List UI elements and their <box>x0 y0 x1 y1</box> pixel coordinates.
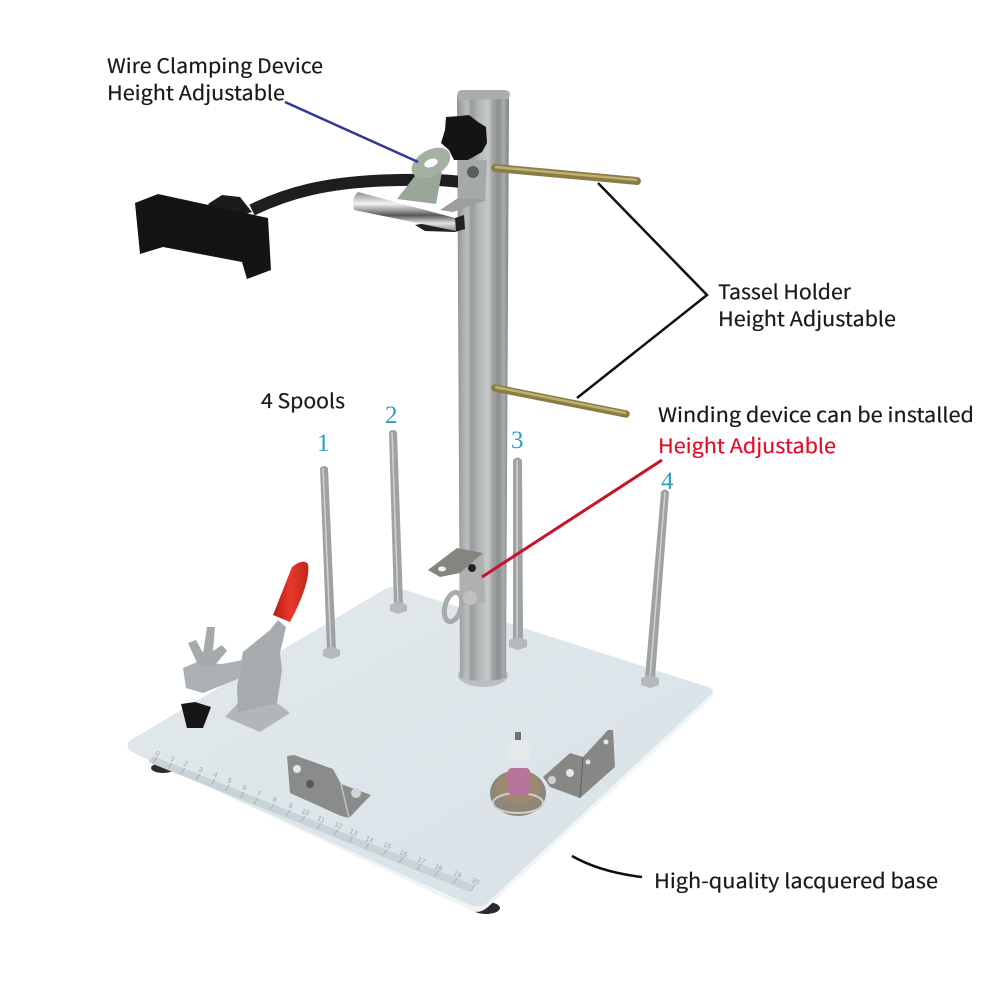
holder knob <box>208 195 252 220</box>
clip bracket tab <box>440 198 487 212</box>
bracket fold <box>580 757 583 798</box>
right bracket <box>543 730 615 798</box>
clip ring hole <box>423 157 439 169</box>
phone holder on gooseneck <box>135 180 460 279</box>
winding device bracket <box>428 548 485 624</box>
spring peg <box>515 732 521 742</box>
bracket holes <box>566 769 574 777</box>
ruler: 20 <box>470 877 480 887</box>
ruler: 12 <box>333 821 343 831</box>
ruler: 7 <box>255 790 262 798</box>
label: winding device: Winding device can be installed <box>658 399 974 428</box>
spool number 2: 2 <box>385 402 398 429</box>
pole collar <box>458 663 508 687</box>
bracket block <box>458 160 487 200</box>
holder clamp <box>135 194 271 279</box>
under clip clamp <box>415 215 465 232</box>
tassel holder rods <box>495 167 637 414</box>
spring dish <box>490 770 546 816</box>
tab hole <box>438 566 446 572</box>
clamp arm <box>183 660 243 693</box>
ruler: 13 <box>348 828 358 838</box>
spool rod 1 <box>320 466 340 659</box>
ruler: 5 <box>226 777 233 785</box>
block <box>460 553 485 607</box>
knob <box>441 115 487 160</box>
label: wire clamping device: Wire Clamping Device <box>107 50 323 79</box>
clamp foot plate <box>225 703 290 732</box>
lacquered base <box>127 587 714 914</box>
spool number 3: 3 <box>511 427 524 454</box>
label: red height adjustable: Height Adjustable <box>658 430 836 459</box>
bolt hole <box>467 166 479 178</box>
ruler: 14 <box>364 835 374 845</box>
label: 4 spools: 4 Spools <box>261 385 345 414</box>
gooseneck arm <box>252 180 460 210</box>
red handle <box>273 562 308 622</box>
block hole <box>468 564 476 572</box>
black tassel pointer lines <box>577 183 707 398</box>
flat tab <box>428 548 483 577</box>
ruler: 2 <box>182 760 189 768</box>
ruler: 6 <box>241 784 248 792</box>
eye hook <box>441 590 465 624</box>
aluminium pole <box>457 90 510 687</box>
ruler: 19 <box>452 870 462 880</box>
label: tassel holder: Height Adjustable <box>718 303 896 332</box>
tension spring and bracket <box>490 730 615 816</box>
blue pointer line <box>285 102 418 162</box>
L bracket on base <box>287 755 371 818</box>
label: lacquered base: High-quality lacquered base <box>654 865 938 894</box>
spool rod 2 <box>389 430 407 614</box>
rubber tip <box>181 702 211 728</box>
dish rim <box>493 793 543 813</box>
lower rod <box>495 387 626 414</box>
ruler: 9 <box>287 802 294 810</box>
hook bolt <box>463 591 477 605</box>
base top surface <box>128 587 713 907</box>
ruler: 4 <box>212 771 219 779</box>
label: tassel holder: Tassel Holder <box>718 276 851 305</box>
spool rod 4 <box>641 490 669 688</box>
clip bar <box>353 192 456 231</box>
black base pointer line <box>572 856 642 877</box>
ruler: 3 <box>197 766 204 774</box>
ruler: 11 <box>316 815 326 825</box>
red pointer line <box>482 460 662 577</box>
spool number 1: 1 <box>317 430 330 457</box>
toggle clamp <box>181 562 308 732</box>
ruler: 17 <box>416 856 426 866</box>
base feet <box>151 690 713 914</box>
spool rods <box>320 430 669 688</box>
upper rod <box>495 167 637 181</box>
clip handle <box>397 172 442 204</box>
ruler: 1 <box>169 755 176 763</box>
wing nut <box>188 627 227 666</box>
pole shaft <box>457 95 509 681</box>
ruler: 10 <box>300 808 310 818</box>
ruler: 16 <box>398 849 408 859</box>
spring cap <box>504 740 532 760</box>
ruler: 0 <box>154 750 161 758</box>
wire clamping device <box>353 115 487 232</box>
pink spool <box>508 768 530 795</box>
clamp upright <box>237 620 286 712</box>
base edge <box>127 690 714 912</box>
ruler <box>148 750 480 892</box>
label: wire clamping device: Height Adjustable <box>107 77 285 106</box>
spool number 4: 4 <box>661 468 674 495</box>
clip washer <box>406 141 456 185</box>
ruler: 18 <box>433 863 443 873</box>
spool rod 3 <box>509 458 527 650</box>
pole cap <box>457 90 510 100</box>
ruler: 8 <box>271 796 278 804</box>
dish inner <box>496 771 540 803</box>
ruler: 15 <box>382 841 392 851</box>
